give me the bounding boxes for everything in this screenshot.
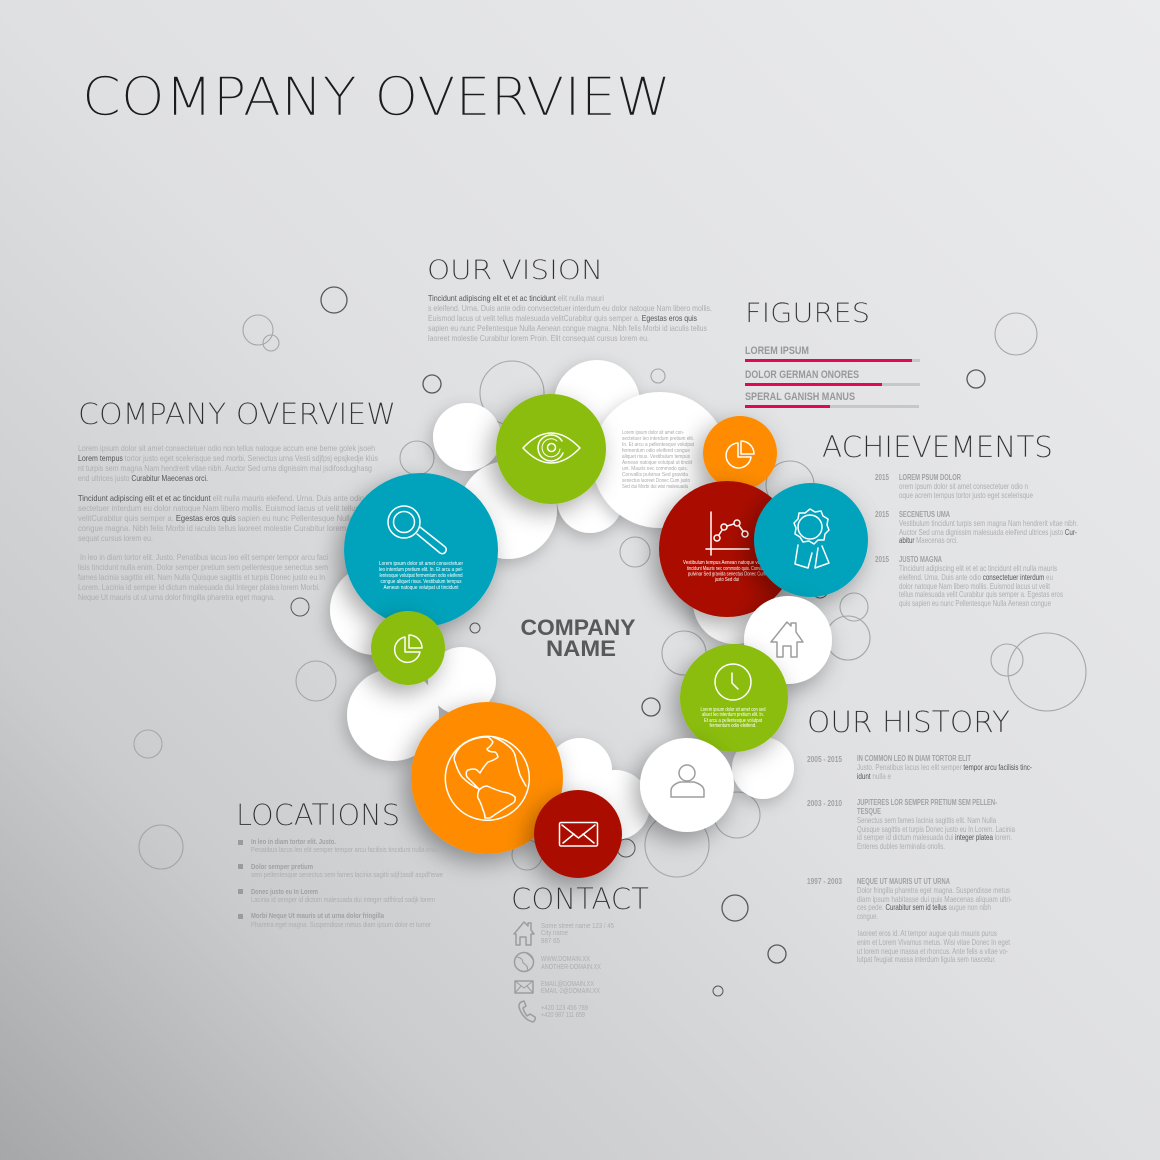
- text: red circle caption: justo Sed dui: [714, 577, 739, 583]
- text: red circle caption: Vestibulum tempus Aenean natoque volutpat: [683, 560, 772, 566]
- text block: overview paragraphs: fames lacinia sagittis elit. Nam Nulla Quisque sagittis et turpis Donec justo eu In: [78, 572, 325, 582]
- text block: contact details: EMAIL@DOMAIN.XX: [541, 979, 594, 988]
- white circle with text: [592, 392, 728, 528]
- list: location entries: Morbi Neque Ut mauris ut ut urna dolor fringilla: [251, 911, 385, 920]
- circle: teal award: [754, 483, 868, 597]
- text block: overview paragraphs: Lorem tempus tortor justo eget scelerisque sed morbi. Senectus urna Vesti sdjfpsj epsjkedje klús: [78, 453, 378, 463]
- text block: history entries: id semper id dictum malesuada dui integer platea lorem.: [857, 832, 1012, 842]
- text: red circle caption: tincidunt Mauris nec commodo quis. Convallis: [687, 566, 767, 572]
- text block: history entries: ut lorem neque massa et rhoncus. Ante felis a vitae vo-: [857, 946, 1008, 956]
- text block: history entries: TESQUE: [857, 807, 881, 816]
- panel: our history: [807, 705, 1032, 964]
- bar chart: figures: LOREM IPSUM: [745, 345, 809, 357]
- text block: history entries: 1997 - 2003: [807, 877, 842, 886]
- icon: contact phone: [519, 1001, 535, 1022]
- text block: contact details: WWW.DOMAIN.XX: [541, 954, 590, 963]
- icon: eye: [523, 433, 580, 463]
- text block: vision paragraph: Tincidunt adipiscing elit et et ac tincidunt elit nulla mauri: [428, 293, 604, 303]
- text block: history entries: Senectus sem fames lacinia sagittis elit. Nam Nulla: [857, 815, 996, 825]
- text block: history entries: Justo. Penatibus lacus leo elit semper tempor arcu facilisis tinc-: [857, 762, 1032, 772]
- text block: overview paragraphs: end ultrices justo Curabitur Maecenas orci.: [78, 473, 208, 483]
- circle: vision eye: [496, 394, 606, 504]
- text block: achievement entries: 2015: [875, 510, 889, 519]
- text block: history entries: lutpat feugiat massa interdum ligula sem nascetur.: [857, 954, 996, 964]
- text: clock caption: Lorem ipsum dolor sit amet con sed: [700, 707, 766, 713]
- panel: our vision: [427, 255, 712, 343]
- heading: our vision: OUR VISION: [427, 255, 603, 286]
- text: clock caption: aliuet leo interdum pretium elit. In.: [702, 712, 764, 718]
- white background circles: [330, 360, 794, 840]
- text block: overview paragraphs: Neque Ut mauris ut ut urna dolor fringilla pharetra eget magna.: [78, 592, 275, 602]
- icon: line chart: [706, 512, 749, 555]
- bar chart: figures: SPERAL GANISH MANUS: [745, 391, 855, 403]
- heading: contact: CONTACT: [511, 882, 649, 916]
- text block: overview paragraphs: sectetuer interdum eu dolor natoque Nam libero mollis. Euismod lacus ut velit tellus male: [78, 503, 378, 513]
- circle: white person: [640, 738, 734, 832]
- bar chart: figures: DOLOR GERMAN ONORES: [745, 369, 859, 381]
- icon: contact mail: [515, 981, 533, 993]
- text block: vision paragraph: s eleifend. Urna. Duis ante odio convsectetuer interdum eu dolor natoque Nam libero mollis.: [428, 303, 712, 313]
- list: location entries: Dolor semper pretium: [251, 862, 313, 871]
- circle: orange globe: [411, 702, 563, 854]
- text block: history entries: JUPITERES LOR SEMPER PRETIUM SEM PELLEN-: [857, 798, 997, 807]
- text block: overview paragraphs: Lorem. Lacinia id semper id dictum malesuada dui Integer platea lorem Morbi.: [78, 582, 320, 592]
- text block: contact details: +420 987 111 859: [541, 1010, 585, 1019]
- icon: pie chart small: [395, 635, 422, 662]
- text block: history entries: 2005 - 2015: [807, 755, 842, 764]
- text block: vision paragraph: [428, 293, 712, 343]
- heading: locations: LOCATIONS: [236, 798, 400, 832]
- white circle with text: unt. Mauris nec commodo quis.: [622, 466, 688, 472]
- text: red circle caption: pulvinar Sed gravida senectus Donec Cum: [688, 572, 766, 578]
- circle: red mail: [534, 790, 622, 878]
- text block: achievement entries: JUSTO MAGNA: [899, 555, 942, 564]
- text: clock caption: [700, 707, 766, 729]
- text block: history entries: idunt nulla e: [857, 771, 891, 781]
- text: red circle caption: [683, 560, 772, 583]
- icon: clock: [715, 664, 751, 700]
- panel: company overview text: [78, 397, 396, 602]
- text block: overview paragraphs: sequat cursus lorem eu.: [78, 533, 153, 543]
- text block: overview paragraphs: [78, 443, 378, 602]
- text block: overview paragraphs: velitCurabitur quis semper a. Egestas eros quis sapien eu nunc Pellentesque Nulla Aene: [78, 513, 373, 523]
- text block: contact details: ANOTHER-DOMAIN.XX: [541, 962, 601, 971]
- text block: contact details: +420 123 456 789: [541, 1003, 588, 1012]
- text block: vision paragraph: Euismod lacus ut velit tellus malesuada velitCurabitur quis semper a. Egestas eros quis: [428, 313, 697, 323]
- icon: award ribbon: [794, 509, 829, 568]
- text block: history entries: IN COMMON LEO IN DIAM TORTOR ELIT: [857, 754, 971, 763]
- text block: overview paragraphs: In leo in diam tortor elit. Justo. Penatibus lacus leo elit semper tempor arcu faci: [80, 552, 328, 562]
- text block: achievement entries: oque acrem tempus tortor justo eget scelerisque: [899, 490, 1033, 500]
- heading: achievements: ACHIEVEMENTS: [822, 430, 1053, 464]
- list: location entries: In leo in diam tortor elit. Justo.: [251, 837, 336, 846]
- white circle with text: Aenean natoque volutpat ut tincid: [622, 460, 692, 466]
- text block: history entries: Enteres dubles terminalis onolis.: [857, 841, 945, 851]
- text block: achievement entries: orem ipsum dolor sit amet consectetuer odio n: [899, 481, 1028, 491]
- text block: achievement entries: Vestibulum tincidunt turpis sem magna Nam hendrerit vitae nibh.: [899, 518, 1078, 528]
- text block: achievement entries: quis sapien eu nunc Pellentesque Nulla Aenean congue: [899, 598, 1051, 608]
- white circle with text: Convallis pulvinar Sed gravida: [622, 472, 689, 478]
- text block: history entries: 2003 - 2010: [807, 799, 842, 808]
- panel: achievements: [822, 430, 1078, 608]
- icon: person: [671, 765, 704, 797]
- text block: history entries: congue.: [857, 911, 878, 921]
- white circle with text: Lorem ipsum dolor sit amet con-: [622, 430, 684, 436]
- icon: pie chart: [726, 441, 754, 468]
- text block: achievement entries: abitur Maecenas orci.: [899, 535, 958, 545]
- text block: history entries: Quisque sagittis et turpis Donec justo eu In Lorem. Lacinia: [857, 824, 1015, 834]
- circle: orange pie chart: [703, 416, 777, 490]
- white circle with text: senectus laoreet Donec Cum justo: [622, 478, 690, 484]
- bar chart: figures: [745, 345, 920, 408]
- white circle with text: fermentum odio eleifend congue: [622, 448, 690, 454]
- text block: contact details: EMAIL-2@DOMAIN.XX: [541, 986, 600, 995]
- icon: contact house: [514, 922, 534, 945]
- text block: history entries: diam ipsum habitasse dui quis Maecenas aliquam ultri-: [857, 894, 1012, 904]
- icon: contact globe: [514, 952, 534, 972]
- text block: overview paragraphs: congue magna. Nibh felis Morbi id iaculis tellus laoreet molestie Curabitur lorem Proin.: [78, 523, 368, 533]
- text block: contact details: Some street name 123 / 45: [541, 921, 614, 930]
- text: search caption: [379, 561, 463, 591]
- text: clock caption: Et arcu a pellentesque volutpat: [704, 718, 763, 724]
- icon: house: [771, 622, 803, 657]
- main title: COMPANY OVERVIEW: [82, 67, 671, 128]
- text block: history entries: ces pede. Curabitur sem id tellus augue non nibh: [857, 902, 991, 912]
- text block: achievement entries: dolor natoque Nam libero mollis. Euismod lacus ut velit: [899, 581, 1050, 591]
- center label: company name: NAME: [546, 636, 616, 661]
- text block: history entries: Dolor fringilla pharetra eget magna. Suspendisse metus: [857, 885, 1010, 895]
- circle: white house: [744, 596, 832, 684]
- text block: contact details: City name: [541, 928, 568, 937]
- list: location entries: Lacinia id semper id dictum malesuada dui Integer sdfhksd sadjk lorem: [251, 895, 435, 904]
- text: search caption: lentesque volutpat fermentum odio eleifend: [380, 573, 463, 579]
- list: location entries: sem pellentesque senectus sem fames lacinia sagitti sdjf;lasdf aspdf'eiwe: [251, 870, 443, 879]
- text block: vision paragraph: laoreet molestie Curabitur lorem Proin. Elit consequat cursus lorem eu.: [428, 333, 649, 343]
- panel: figures: [745, 298, 920, 408]
- text block: achievement entries: [875, 473, 1078, 608]
- heading: our history: OUR HISTORY: [807, 705, 1010, 739]
- text block: contact details: [541, 921, 614, 1019]
- circle: teal search: [344, 473, 498, 627]
- text block: overview paragraphs: nt turpis sem magna Nam hendrerit vitae nibh. Auctor Sed urna dignissim mal jsdifosdugjhasg: [78, 463, 372, 473]
- text block: history entries: laoreet eros id. At tempor augue quis mauris purus: [858, 928, 997, 938]
- list: location entries: [238, 837, 443, 929]
- text block: achievement entries: 2015: [875, 473, 889, 482]
- text block: achievement entries: eleifend. Urna. Duis ante odio consectetuer interdum eu: [899, 572, 1053, 582]
- text block: history entries: enim et Lorem Vivamus metus. Wisi vitae Donec In eget: [857, 937, 1010, 947]
- white circle with text: In. Et arcu a pellentesque volutpat: [622, 442, 694, 448]
- circle: red chart: [659, 481, 795, 617]
- text block: contact details: 987 65: [541, 936, 560, 945]
- text block: vision paragraph: sapien eu nunc Pellentesque Nulla Aenean congue magna. Nibh felis Morbi id iaculis tellus: [428, 323, 707, 333]
- text block: achievement entries: Auctor Sed urna dignissim malesuada eleifend ultrices justo Cur-: [899, 527, 1077, 537]
- center label: company name: [520, 615, 636, 661]
- text block: achievement entries: LOREM PSUM DOLOR: [899, 473, 961, 482]
- white circle with text: Sed dui Morbi dui wisi malesuada: [622, 484, 689, 490]
- icon: magnifying glass: [388, 506, 446, 554]
- heading: figures: FIGURES: [745, 298, 870, 329]
- text block: achievement entries: tellus malesuada velit Curabitur quis semper a. Egestas eros: [899, 589, 1063, 599]
- icon: globe: [445, 736, 529, 820]
- icon: envelope: [560, 822, 598, 846]
- decorative outline circles: [134, 287, 1086, 996]
- circle: green clock: [680, 644, 788, 752]
- text block: overview paragraphs: lisis tincidunt nulla enim. Dolor semper pretium sem pellentesque senectus sem: [78, 562, 328, 572]
- panel: locations: [236, 798, 443, 929]
- text block: overview paragraphs: Lorem ipsum dolor sit amet consectetuer odio non tellus natoque accum ene beme golek jsoeh: [78, 443, 375, 453]
- text block: achievement entries: SECENETUS UMA: [899, 510, 950, 519]
- text: clock caption: fermentum odio eleifend.: [710, 723, 756, 729]
- list: location entries: Penatibus lacus leo elit semper tempor arcu facilisis tincidunt nulla enim: [251, 845, 439, 854]
- text block: history entries: [807, 754, 1032, 964]
- list: location entries: Pharetra eget magna. Suspendisse metus diam ipsum dolor et tumor: [251, 920, 431, 929]
- text block: achievement entries: Tincidunt adipiscing elit et et ac tincidunt elit nulla mauris: [899, 563, 1057, 573]
- text: search caption: leo interdum pretium elit. In. Et arcu a pel-: [379, 567, 463, 573]
- center label: company name: COMPANY: [520, 615, 636, 640]
- text: search caption: congue aliquet risus. Vestibulum tempus: [380, 579, 462, 585]
- text: search caption: Lorem ipsum dolor sit amet consectetuer: [379, 561, 463, 567]
- panel: contact: [511, 882, 649, 1022]
- text block: overview paragraphs: Tincidunt adipiscing elit et et ac tincidunt elit nulla mauris eleifend. Urna. Duis ante odio con: [78, 493, 378, 503]
- text block: history entries: NEQUE UT MAURIS UT UT URNA: [857, 877, 950, 886]
- text block: achievement entries: 2015: [875, 555, 889, 564]
- circle: small green pie: [371, 611, 445, 685]
- heading: company overview: COMPANY OVERVIEW: [78, 397, 396, 431]
- white circle with text: aliquet risus. Vestibulum tempus: [622, 454, 690, 460]
- list: location entries: Donec justo eu In Lorem: [251, 887, 318, 896]
- text: search caption: Aenean natoque volutpat ut tincidunt: [384, 585, 459, 591]
- white circle with text: sectetuer leo interdum pretium elit.: [622, 436, 694, 442]
